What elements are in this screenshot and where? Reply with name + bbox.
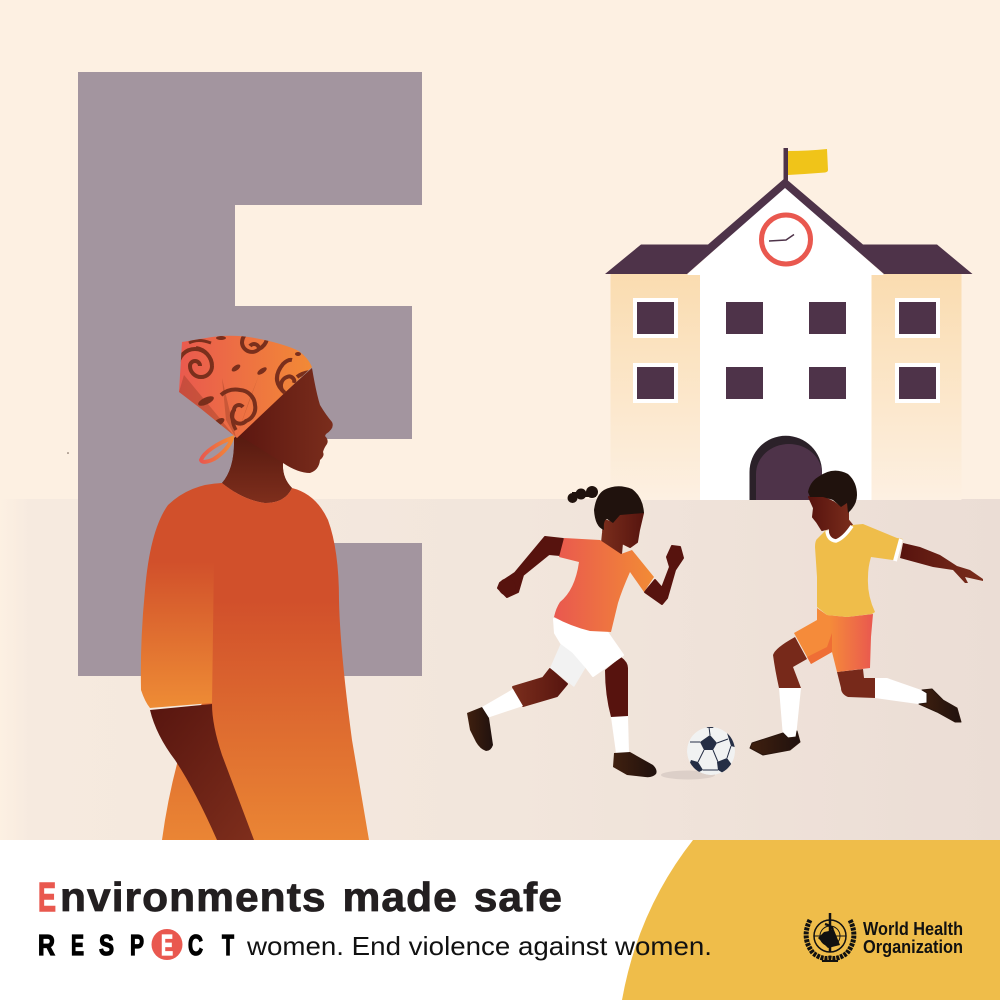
dress body — [162, 483, 369, 840]
respect logotype: T — [222, 930, 234, 962]
roof — [605, 178, 972, 274]
school building — [605, 148, 972, 500]
girl front shoe — [613, 752, 657, 777]
boy front leg — [773, 637, 807, 688]
boy back sock — [875, 678, 927, 705]
WHO logo: Organization — [863, 937, 963, 957]
ground — [0, 499, 1000, 840]
respect logotype: R — [38, 930, 55, 962]
WHO logo — [806, 913, 963, 961]
girl hair — [594, 486, 644, 530]
small speck — [67, 452, 69, 454]
boy front sock — [779, 688, 801, 737]
neck and face — [222, 368, 333, 503]
respect logotype: P — [130, 930, 144, 962]
clock — [762, 215, 811, 265]
girl back leg — [513, 669, 567, 706]
gable — [687, 186, 884, 275]
girl front sock — [611, 716, 629, 753]
boy playing football — [750, 471, 983, 755]
right wing — [872, 274, 962, 500]
boy back shoe — [919, 689, 961, 722]
girl front leg — [605, 657, 628, 717]
boy collar — [827, 526, 852, 541]
girl front arm — [645, 546, 683, 604]
door — [750, 436, 822, 500]
ball shadow — [661, 770, 715, 780]
girl shirt — [554, 538, 654, 632]
respect logotype: C — [188, 930, 203, 962]
flag pole — [784, 148, 788, 182]
large letter E — [78, 72, 422, 676]
boy sleeve cuff — [895, 539, 901, 561]
arm — [150, 704, 254, 840]
girl ponytail — [568, 486, 598, 503]
flag — [788, 149, 828, 175]
boy front shoe — [750, 731, 800, 755]
boy arm — [900, 543, 983, 583]
girl neck and face — [602, 513, 643, 554]
girl shorts — [554, 619, 623, 676]
dress sleeve — [141, 483, 222, 708]
main block — [700, 274, 872, 500]
girl playing football — [467, 486, 683, 777]
boy neck and face — [809, 497, 852, 540]
neck shade — [222, 436, 292, 503]
respect logotype: E — [161, 930, 173, 962]
girl back sock — [482, 689, 523, 718]
boy shirt — [815, 524, 903, 617]
boy shorts fold — [807, 633, 832, 664]
boy shorts — [794, 608, 873, 672]
head wrap — [179, 336, 312, 438]
respect logotype: S — [99, 930, 114, 962]
woman in orange dress — [141, 325, 369, 840]
WHO emblem — [806, 913, 854, 961]
respect logotype — [38, 929, 234, 962]
yellow corner shape — [622, 840, 1000, 1000]
heading: nvironments made safe — [60, 874, 563, 920]
WHO name: World Health — [863, 919, 963, 939]
head wrap loop — [201, 438, 232, 462]
football — [687, 727, 735, 775]
footer band — [0, 840, 1000, 1000]
girl back arm — [498, 537, 563, 597]
left wing — [610, 274, 700, 500]
girl shorts back — [550, 643, 586, 687]
red circle — [152, 929, 182, 960]
boy hair — [808, 471, 857, 513]
respect logotype: E — [71, 930, 84, 962]
tagline: women. End violence against women. — [246, 931, 712, 961]
girl back shoe — [467, 707, 493, 751]
heading: E — [38, 874, 56, 920]
boy back leg — [837, 669, 875, 698]
windows — [633, 298, 940, 403]
